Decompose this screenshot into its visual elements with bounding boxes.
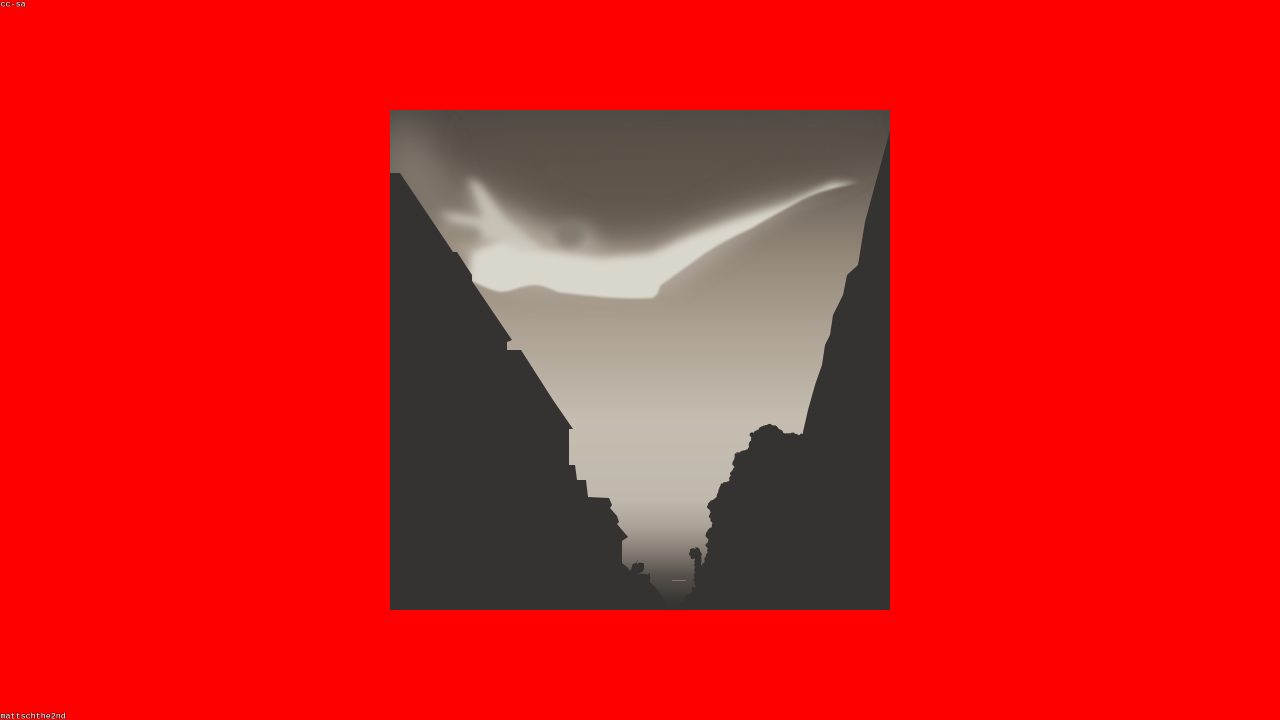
sky gradient (390, 110, 890, 610)
distant light streak (672, 580, 686, 581)
shadow patch below wisp (442, 224, 482, 244)
dark cloud mass (510, 167, 784, 246)
cloud wisps (440, 176, 540, 246)
left distant tree (630, 560, 650, 582)
lighter upper-left sky (390, 114, 454, 205)
cloud highlight (465, 183, 858, 310)
dark hollow in cloud (555, 221, 585, 247)
right building edge (803, 130, 890, 610)
right tree mass (685, 424, 803, 598)
cloud body, soft upper and crisp lower edge (465, 183, 858, 310)
small palm tree (690, 548, 702, 582)
infographic canvas (0, 2, 890, 719)
photo: sky and silhouettes (385, 110, 890, 614)
cloud soft halo (440, 182, 840, 295)
left building silhouette (390, 173, 668, 610)
